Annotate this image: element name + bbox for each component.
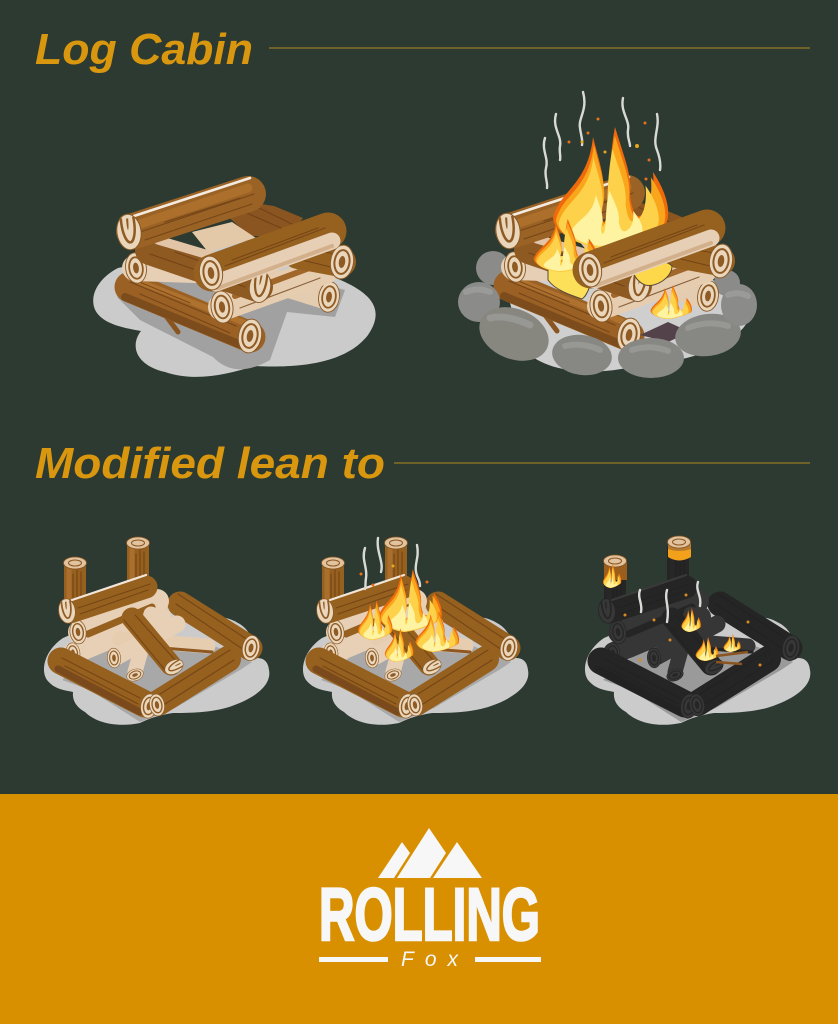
post tops with flames [603, 536, 691, 588]
flame: lower left [534, 219, 597, 299]
sub-wordmark [319, 948, 541, 971]
illustration: unlit lean-to fire [44, 537, 269, 725]
wordmark: ROLLING [319, 873, 540, 956]
flame: main [553, 127, 668, 248]
heading: Modified lean to: Modified lean to [35, 439, 385, 488]
stones [458, 282, 757, 379]
background panel [0, 0, 838, 794]
small flames [681, 608, 748, 664]
icon: mountains [378, 828, 482, 878]
illustration: burning log cabin fire with stone ring [458, 92, 757, 379]
illustration: burning lean-to fire [303, 537, 528, 725]
smoke and embers [624, 582, 762, 666]
footer band [0, 794, 838, 1024]
logo: Rolling Fox [319, 828, 541, 971]
smoke and sparks [544, 92, 660, 188]
flame: lower right [650, 285, 692, 319]
heading: Log Cabin: Log Cabin [35, 25, 253, 74]
flame: lower centre [633, 262, 672, 286]
sub-wordmark: Fox [401, 948, 460, 971]
illustration: unlit log cabin fire [93, 178, 376, 377]
smoke and sparks [360, 538, 428, 589]
illustration: burnt-down charred lean-to fire [585, 536, 810, 725]
flames [358, 569, 459, 662]
